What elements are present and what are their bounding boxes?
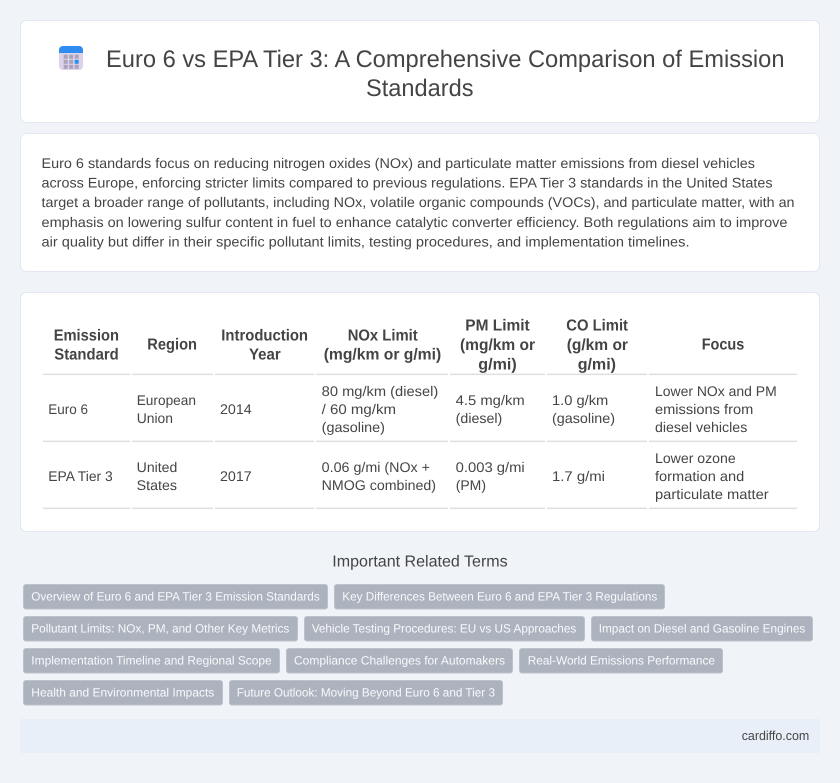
table row: Euro 6: emissions from [655,401,753,417]
table row: EPA Tier 3: 0.06 g/mi (NOx + [322,459,430,475]
icon: calendar [59,46,83,70]
table header row: (mg/km or [460,337,535,354]
table row: Euro 6: 80 mg/km (diesel) [322,383,438,399]
table row: Euro 6: diesel vehicles [655,419,747,435]
tag [24,680,222,705]
table row: Euro 6: (diesel) [456,410,502,426]
tag: Health and Environmental Impacts [31,686,214,700]
tag: Implementation Timeline and Regional Scope [31,654,272,668]
table row: EPA Tier 3: States [137,477,177,493]
text block: summary: across Europe, enforcing stricter limits compared to previous regulations. EPA Tier 3 standards in the United States [42,175,772,191]
table header row: Emission [54,328,119,344]
tag [24,616,298,641]
table row: EPA Tier 3: 2017 [220,468,252,484]
table header row: Focus [702,336,744,354]
title: Euro 6 vs EPA Tier 3: A Comprehensive Comparison of Emission [106,46,784,73]
tag: Compliance Challenges for Automakers [294,654,505,668]
table row: Euro 6: Union [137,410,173,426]
text block: summary: target a broader range of pollutants, including NOx, volatile organic compounds (VOCs), and particulate matter, with an [42,194,794,210]
table row: EPA Tier 3: 1.7 g/mi [552,468,605,484]
table row: EPA Tier 3 [48,450,769,502]
table row: EPA Tier 3: United [137,459,177,475]
panel: comparison table [20,292,820,532]
tag [520,648,722,673]
table row: EPA Tier 3: 0.003 g/mi [456,459,525,475]
title: Standards [366,75,474,102]
text block: summary: air quality but differ in their specific pollutant limits, testing procedures, and implementation timelines. [42,233,690,249]
table header row: (g/km or [567,337,628,354]
tag [24,648,280,673]
table header row: g/mi) [478,356,517,374]
tag [286,648,512,673]
table header row: Introduction [221,328,308,344]
table row: Euro 6: 2014 [220,401,252,417]
table row: EPA Tier 3: NMOG combined) [322,477,436,493]
table row: Euro 6: Euro 6 [48,401,88,417]
tag [304,616,584,641]
table row: EPA Tier 3: formation and [655,468,744,484]
table row: Euro 6: 4.5 mg/km [456,392,525,408]
tag: Overview of Euro 6 and EPA Tier 3 Emission Standards [31,590,320,604]
tag [230,680,502,705]
table header row: (mg/km or g/mi) [324,346,441,364]
tag: Pollutant Limits: NOx, PM, and Other Key Metrics [31,622,289,636]
related term tags [24,584,812,705]
table header row: CO Limit [566,318,629,334]
tag: Key Differences Between Euro 6 and EPA Tier 3 Regulations [342,590,657,604]
table header row [54,318,744,374]
tag [334,584,664,609]
table row: EPA Tier 3: Lower ozone [655,450,736,466]
text block: summary: Euro 6 standards focus on reducing nitrogen oxides (NOx) and particulate matter emissions from diesel vehicles [42,155,755,171]
table header row: Year [249,346,281,364]
tag [24,584,328,609]
tag: Real-World Emissions Performance [528,654,715,668]
footer [20,719,820,753]
table row: Euro 6 [48,383,777,435]
panel: title card [20,20,820,122]
table row: Euro 6: European [137,392,196,408]
table row: EPA Tier 3: EPA Tier 3 [48,468,113,484]
table row: Euro 6: (gasoline) [322,419,385,435]
table row: Euro 6: Lower NOx and PM [655,383,777,399]
table header row: NOx Limit [348,328,418,344]
table row: Euro 6: 1.0 g/km [552,392,608,408]
tag: Vehicle Testing Procedures: EU vs US Approaches [312,622,576,636]
panel: intro paragraph [20,134,820,272]
title [106,46,784,102]
table row: EPA Tier 3: (PM) [456,477,486,493]
table header row: Standard [54,346,119,364]
text block: summary [42,155,794,249]
tag: Impact on Diesel and Gasoline Engines [599,622,805,636]
tag [592,616,812,641]
table row: EPA Tier 3: particulate matter [655,486,769,502]
table row: Euro 6: / 60 mg/km [322,401,396,417]
table header row: g/mi) [578,356,616,374]
heading: related terms: Important Related Terms [332,554,508,571]
table header row: PM Limit [465,318,530,334]
table row: Euro 6: (gasoline) [552,410,615,426]
footer: cardiffo.com [742,728,809,743]
tag: Future Outlook: Moving Beyond Euro 6 and Tier 3 [237,686,495,700]
text block: summary: emphasis on lowering sulfur content in fuel to enhance catalytic converter efficiency. Both regulations aim to improve [42,214,788,230]
table header row: Region [147,336,197,354]
